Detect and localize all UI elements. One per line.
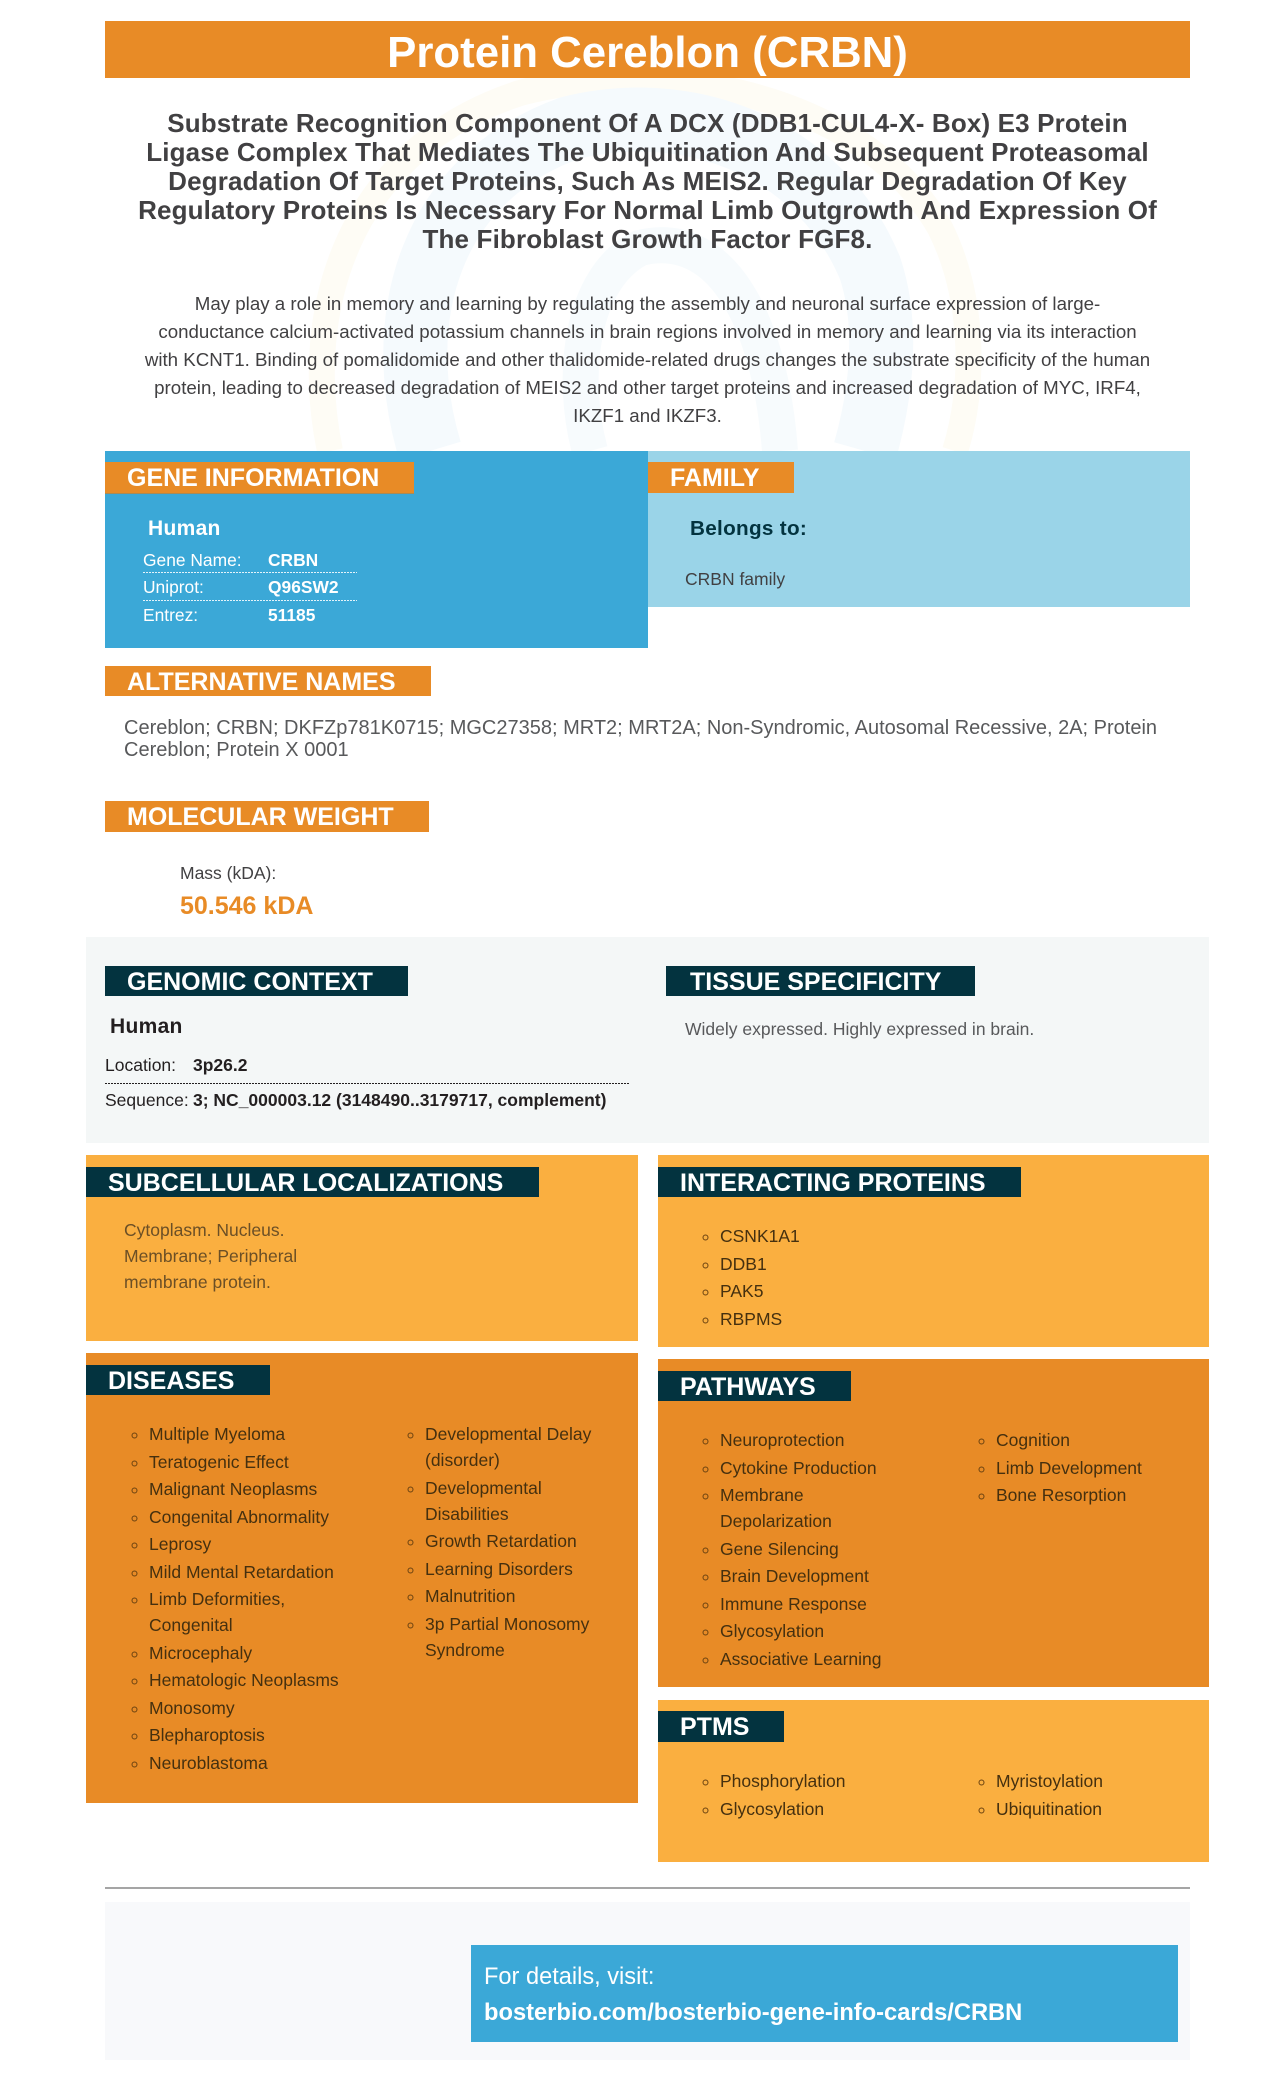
disease list column 2: (disorder) [425,1450,500,1470]
disease list column 1: Blepharoptosis [149,1725,265,1745]
protein list: RBPMS [720,1308,782,1328]
localization text: membrane protein. [124,1272,271,1292]
pathway list column 1: Neuroprotection [720,1430,845,1450]
heading: ptms [658,1711,784,1742]
mass value: 50.546 kDA [180,892,313,920]
disease list column 2: 3p Partial Monosomy [425,1614,589,1634]
genomic sequence: Sequence: [105,1090,189,1110]
pathway list column 1: Cytokine Production [720,1458,877,1478]
subtitle: Degradation Of Target Proteins, Such As MEIS2. Regular Degradation Of Key [168,166,1127,196]
tissue specificity text: Widely expressed. Highly expressed in brain. [685,1019,1034,1039]
alternative names text [124,716,1157,760]
panel: subcellular localizations [86,1155,638,1341]
disease list column 1: Congenital [149,1615,233,1635]
pathway list column 2: Cognition [996,1430,1070,1450]
heading: diseases: DISEASES [108,1367,234,1395]
callout: details link [471,1945,1178,2042]
belongs to label: Belongs to: [690,517,807,540]
ptm list column 2: Myristoylation [996,1771,1103,1791]
description: protein, leading to decreased degradation of MEIS2 and other target proteins and increased degradation of MYC, IRF4, [154,377,1141,398]
ptm list column 1: Phosphorylation [720,1771,846,1791]
heading: alternative names: ALTERNATIVE NAMES [127,668,396,696]
genomic location: Location: [105,1055,176,1075]
ptm list column 2: Ubiquitination [996,1798,1102,1818]
disease list column 2: Learning Disorders [425,1558,573,1578]
localization text: Cytoplasm. Nucleus. [124,1220,284,1240]
panel: diseases [86,1353,638,1803]
gene fields [143,550,357,625]
pathway list column 1: Glycosylation [720,1621,824,1641]
subtitle: Regulatory Proteins Is Necessary For Normal Limb Outgrowth And Expression Of [138,194,1157,224]
description: conductance calcium-activated potassium channels in brain regions involved in memory and learning via its interaction [158,321,1137,342]
heading: diseases [86,1365,270,1395]
description [144,293,1150,426]
gene fields: Entrez: [143,605,198,625]
protein list [702,1226,800,1328]
background watermark logo [309,78,982,451]
disease list column 1: Hematologic Neoplasms [149,1670,339,1690]
pathway list column 2: Limb Development [996,1458,1142,1478]
species label: Human [148,517,221,540]
protein list: CSNK1A1 [720,1226,800,1246]
pathway list column 1: Depolarization [720,1511,832,1531]
disease list column 2: Disabilities [425,1504,509,1524]
heading: interacting proteins: INTERACTING PROTEINS [680,1169,986,1197]
gene fields: Uniprot: [143,577,204,597]
gene fields: 51185 [268,605,315,625]
gene fields: Q96SW2 [268,577,339,597]
panel: ptms [658,1700,1209,1862]
pathway list column 2 [978,1430,1142,1505]
subtitle: The Fibroblast Growth Factor FGF8. [422,224,872,254]
protein list: PAK5 [720,1281,763,1301]
pathway list column 1: Gene Silencing [720,1538,839,1558]
disease list column 2: Developmental Delay [425,1424,591,1444]
title [105,21,1190,78]
disease list column 1: Monosomy [149,1698,235,1718]
callout: details link: bosterbio.com/bosterbio-gene-info-cards/CRBN [484,2000,1022,2026]
gene fields: Gene Name: [143,550,242,570]
disease list column 2 [408,1424,592,1660]
subtitle: Ligase Complex That Mediates The Ubiquitination And Subsequent Proteasomal [146,136,1149,166]
panel: gene information [105,451,648,648]
disease list column 2: Malnutrition [425,1586,515,1606]
protein list: DDB1 [720,1254,767,1274]
disease list column 1: Limb Deformities, [149,1589,285,1609]
ptm list column 2 [978,1771,1103,1818]
panel: interacting proteins [658,1155,1209,1347]
subtitle: Substrate Recognition Component Of A DCX (DDB1-CUL4-X- Box) E3 Protein [167,108,1128,138]
description: May play a role in memory and learning by regulating the assembly and neuronal surface expression of large- [195,293,1100,314]
panel: pathways [658,1359,1209,1687]
pathway list column 1: Brain Development [720,1566,869,1586]
heading: genomic context: GENOMIC CONTEXT [127,968,373,996]
disease list column 1: Neuroblastoma [149,1752,268,1772]
subtitle [138,108,1157,254]
species label: Human [110,1015,183,1038]
heading: molecular weight: MOLECULAR WEIGHT [127,803,394,831]
callout: details link: For details, visit: [484,1964,654,1990]
description: IKZF1 and IKZF3. [573,405,722,426]
disease list column 1: Microcephaly [149,1642,252,1662]
pathway list column 2: Bone Resorption [996,1485,1126,1505]
panel: family [648,451,1190,607]
gene fields: CRBN [268,550,318,570]
disease list column 1: Mild Mental Retardation [149,1562,334,1582]
disease list column 1 [132,1424,339,1772]
localization text: Membrane; Peripheral [124,1246,297,1266]
panel: footer [105,1902,1190,2060]
alternative names text: Cereblon; Protein X 0001 [124,738,349,760]
genomic location [105,1055,247,1075]
ptm list column 1: Glycosylation [720,1798,824,1818]
disease list column 2: Growth Retardation [425,1531,577,1551]
ptm list column 1 [702,1771,846,1818]
disease list column 2: Syndrome [425,1640,505,1660]
pathway list column 1: Membrane [720,1485,804,1505]
heading: pathways: PATHWAYS [680,1373,816,1401]
heading: family [648,462,794,493]
disease list column 2: Developmental [425,1478,542,1498]
disease list column 1: Congenital Abnormality [149,1506,329,1526]
heading: gene information: GENE INFORMATION [127,464,379,492]
disease list column 1: Teratogenic Effect [149,1452,289,1472]
heading: pathways [658,1371,851,1401]
pathway list column 1 [702,1430,881,1668]
disease list column 1: Leprosy [149,1534,211,1554]
mass label: Mass (kDA): [180,863,276,883]
disease list column 1: Malignant Neoplasms [149,1479,317,1499]
alternative names text: Cereblon; CRBN; DKFZp781K0715; MGC27358; MRT2; MRT2A; Non-Syndromic, Autosomal Recessive, 2A; Protein [124,716,1157,738]
heading: tissue specificity: TISSUE SPECIFICITY [690,968,941,996]
description: with KCNT1. Binding of pomalidomide and other thalidomide-related drugs changes the substrate specificity of the human [145,349,1150,370]
genomic sequence [105,1090,606,1110]
heading: ptms: PTMS [680,1713,749,1741]
title: Protein Cereblon (CRBN) [387,28,908,77]
heading: subcellular localizations: SUBCELLULAR LOCALIZATIONS [108,1169,503,1197]
panel: genomic context and tissue specificity: 3p26.2 [193,1055,247,1075]
pathway list column 1: Immune Response [720,1594,867,1614]
heading: family: FAMILY [670,464,759,492]
panel: genomic context and tissue specificity: 3; NC_000003.12 (3148490..3179717, complement) [193,1090,606,1110]
pathway list column 1: Associative Learning [720,1648,881,1668]
family value: CRBN family [685,569,785,589]
localization text [124,1220,297,1292]
panel: genomic context and tissue specificity [86,937,1209,1143]
disease list column 1: Multiple Myeloma [149,1424,285,1444]
